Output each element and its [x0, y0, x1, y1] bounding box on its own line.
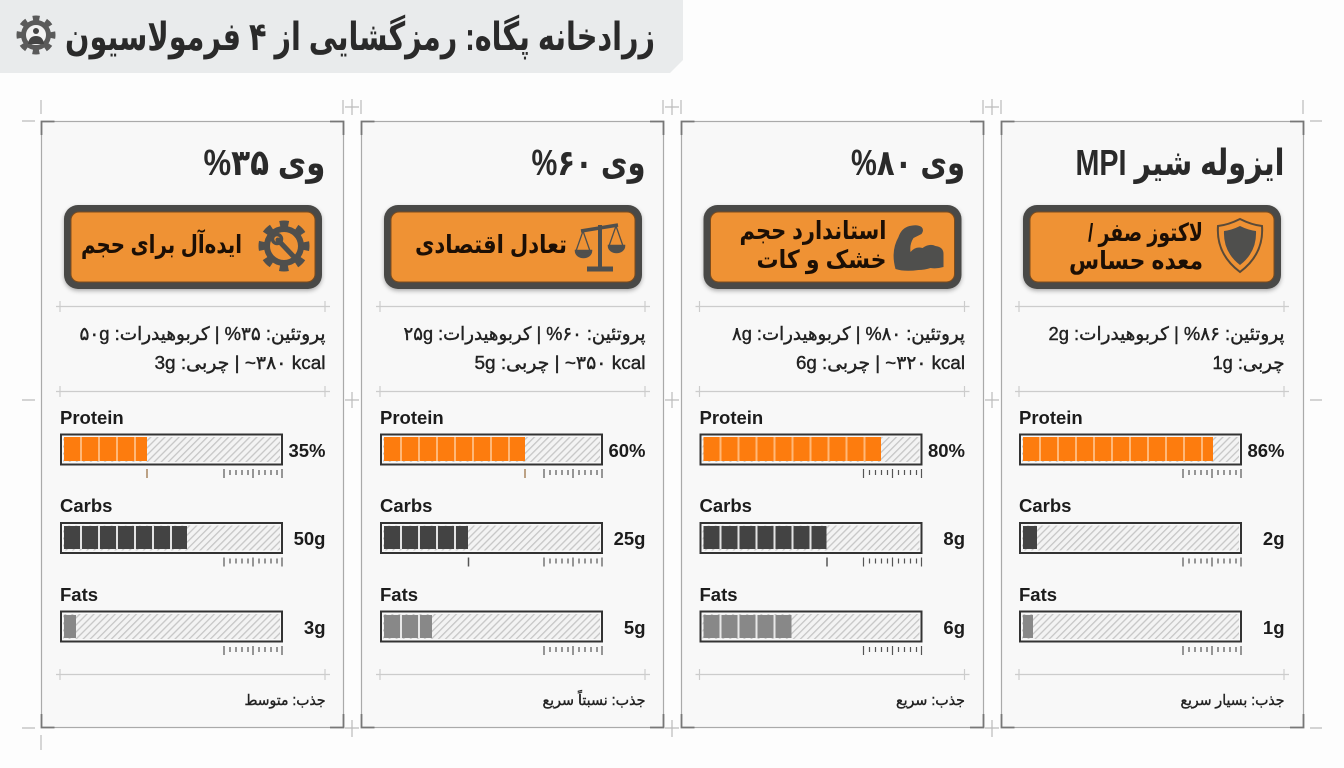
fats bar: 3g	[304, 617, 326, 638]
icon: gear and wrench	[262, 224, 306, 268]
fats bar	[380, 584, 646, 655]
carbs bar: Carbs	[700, 495, 752, 516]
protein bar	[60, 407, 326, 478]
absorption note: جذب: متوسط	[244, 693, 326, 709]
macro summary: ⁦~۳۵۰ kcal⁩ | چربی: 5g	[474, 352, 646, 374]
protein bar: 80%	[928, 440, 965, 461]
fats bar: Fats	[380, 584, 418, 605]
heading: وی ۶۰%	[532, 142, 646, 184]
badge	[64, 205, 322, 289]
protein bar	[380, 407, 646, 478]
absorption note: جذب: بسیار سریع	[1180, 693, 1284, 709]
carbs bar: Carbs	[60, 495, 112, 516]
heading: وی ۳۵%	[204, 142, 326, 184]
protein bar: 35%	[288, 440, 326, 461]
protein bar: 60%	[608, 440, 646, 461]
carbs bar: Carbs	[1019, 495, 1071, 516]
panel: whey 80	[682, 122, 984, 728]
macro summary: ⁦~۳۸۰ kcal⁩ | چربی: 3g	[154, 352, 326, 374]
protein bar	[700, 407, 965, 478]
macro summary: پروتئین: ۳۵% | کربوهیدرات: ۵۰g	[80, 323, 326, 345]
fats bar	[700, 584, 965, 655]
carbs bar: 25g	[614, 528, 646, 549]
badge	[1023, 205, 1281, 289]
carbs bar	[380, 495, 646, 566]
macro summary	[376, 301, 650, 397]
panel: whey 60	[362, 122, 664, 728]
carbs bar	[1019, 495, 1284, 566]
absorption note: جذب: نسبتاً سریع	[542, 690, 646, 709]
protein bar: Protein	[1019, 407, 1083, 428]
fats bar: 1g	[1263, 617, 1284, 638]
header band	[0, 0, 683, 73]
protein bar: 86%	[1247, 440, 1284, 461]
badge: خشک و کات	[756, 246, 886, 275]
heading: وی ۸۰%	[851, 142, 965, 184]
protein bar: Protein	[700, 407, 763, 428]
macro summary	[696, 301, 970, 397]
fats bar	[60, 584, 326, 655]
icon: shield	[1218, 219, 1262, 272]
macro summary	[56, 301, 330, 397]
icon: flexed arm	[894, 225, 944, 271]
protein bar	[1019, 407, 1284, 478]
carbs bar: Carbs	[380, 495, 432, 516]
badge text: ایده‌آل برای حجم	[81, 229, 242, 260]
fats bar: Fats	[60, 584, 98, 605]
badge text: لاکتوز صفر /	[1088, 219, 1203, 248]
macro summary: پروتئین: ۸۶% | کربوهیدرات: 2g	[1048, 323, 1284, 345]
carbs bar: 8g	[943, 528, 965, 549]
macro summary: چربی: 1g	[1212, 352, 1284, 374]
absorption note: جذب: سریع	[896, 693, 965, 709]
badge	[704, 205, 962, 289]
protein bar: Protein	[60, 407, 124, 428]
panel: milk protein isolate	[1002, 122, 1304, 728]
carbs bar: 2g	[1263, 528, 1284, 549]
macro summary: پروتئین: ۶۰% | کربوهیدرات: ۲۵g	[403, 323, 646, 345]
title: زرادخانه پگاه: رمزگشایی از ۴ فرمولاسیون	[65, 14, 655, 60]
badge	[384, 205, 642, 289]
fats bar	[1019, 584, 1284, 655]
fats bar: Fats	[1019, 584, 1057, 605]
fats bar: 6g	[943, 617, 965, 638]
macro summary: پروتئین: ۸۰% | کربوهیدرات: ۸g	[732, 323, 965, 345]
panel: whey 35	[42, 122, 344, 728]
fats bar: 5g	[624, 617, 646, 638]
badge text: تعادل اقتصادی	[415, 231, 567, 259]
carbs bar	[60, 495, 326, 566]
badge: معده حساس	[1069, 247, 1203, 275]
heading: ایزوله شیر MPI	[1076, 142, 1284, 184]
carbs bar	[700, 495, 965, 566]
fats bar: Fats	[700, 584, 738, 605]
icon: gear with team	[20, 18, 52, 52]
protein bar: Protein	[380, 407, 444, 428]
icon: scales	[576, 225, 624, 269]
badge text: استاندارد حجم	[740, 217, 886, 245]
macro summary: ⁦~۳۲۰ kcal⁩ | چربی: 6g	[796, 352, 965, 374]
macro summary	[1015, 301, 1289, 397]
carbs bar: 50g	[294, 528, 326, 549]
